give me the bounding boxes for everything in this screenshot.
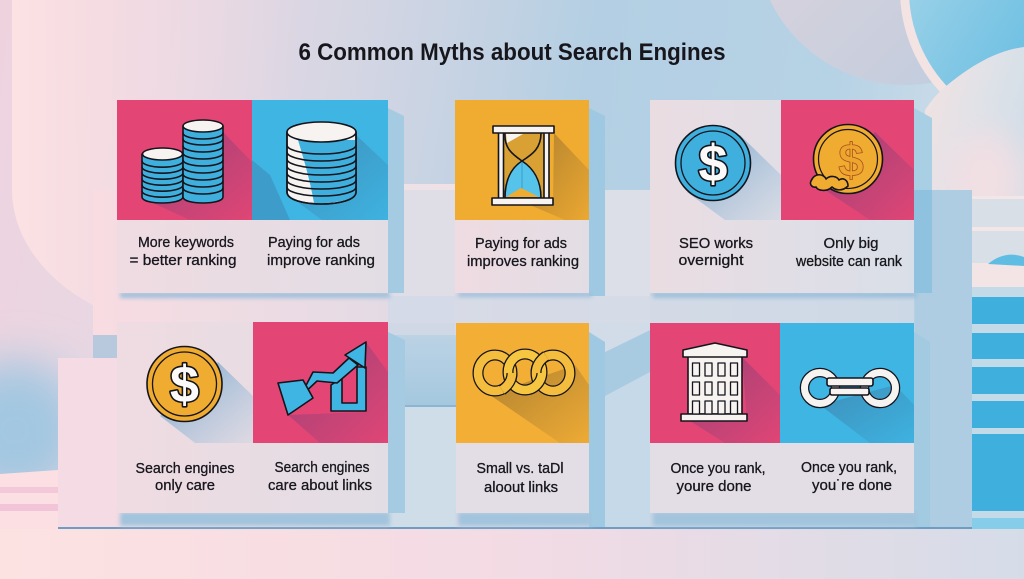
icon: gold coin with chain: $ [838, 134, 864, 186]
text: search engines: Search engines [136, 460, 234, 477]
text: overnight: overnight [678, 252, 744, 269]
icon: building [681, 343, 747, 421]
text: improves ranking: improves ranking [467, 253, 579, 270]
panel: blue ads tile [252, 100, 388, 220]
card: search engines care [117, 322, 388, 513]
panel: pink keywords tile [117, 100, 252, 220]
text: you're done: you˙re done [812, 477, 892, 494]
panel: blue link tile [780, 323, 914, 443]
text: once you rank: Once you rank, [670, 460, 766, 477]
text: small vs: Small vs. taDl [476, 460, 564, 477]
icon: hourglass [492, 126, 554, 205]
right stepped stripes [972, 196, 1024, 531]
card: SEO overnight and big websites [650, 100, 914, 293]
panel: orange hourglass tile [455, 100, 589, 220]
text: about links: aloout links [484, 479, 558, 496]
text: paying for ads: Paying for ads [475, 235, 567, 252]
title: 6 Common Myths about Search Engines [298, 39, 726, 66]
card: keywords and paying for ads [117, 100, 388, 293]
text: only big: Only big [824, 235, 878, 252]
back wall platform [93, 184, 972, 336]
text: only care: only care [155, 477, 215, 494]
icon: single coin stack [287, 122, 356, 204]
text: once you rank: Once you rank, [801, 459, 897, 476]
panel: pink gold coin tile [781, 100, 914, 220]
panel: pale dollar tile [676, 126, 781, 220]
text: SEO works: SEO works [679, 235, 753, 252]
text: website can rank: website can rank [795, 253, 902, 270]
text: youre done: youre done [676, 478, 752, 495]
card: once you rank [650, 323, 914, 513]
text: more keywords: More keywords [138, 234, 234, 251]
decorative disc, top right [755, 0, 1024, 230]
text: search engines: Search engines [274, 459, 370, 476]
icon: two coin stacks [142, 120, 223, 203]
panel: pink building tile [650, 323, 780, 443]
floor [0, 470, 1024, 579]
icon: chain link [804, 372, 896, 404]
card: hourglass [455, 100, 589, 293]
panel: orange chain tile [456, 323, 589, 443]
icon: gold dollar coin: $ [170, 356, 199, 414]
panel: pink arrow tile [253, 322, 388, 443]
icon: blue dollar coin: $ [699, 135, 728, 193]
text: care about links: care about links [268, 477, 372, 494]
text: paying for ads: Paying for ads [268, 234, 360, 251]
card side faces [120, 108, 932, 527]
panel: pale dollar tile [147, 346, 253, 443]
card: small vs tall [456, 323, 589, 513]
lower platform [58, 190, 972, 529]
icon: chain links [478, 354, 570, 391]
text: improve ranking: improve ranking [267, 252, 375, 269]
text: better ranking: = better ranking [130, 252, 236, 269]
icon: blue zigzag arrow [278, 342, 366, 415]
gap panels between cards [388, 190, 914, 527]
